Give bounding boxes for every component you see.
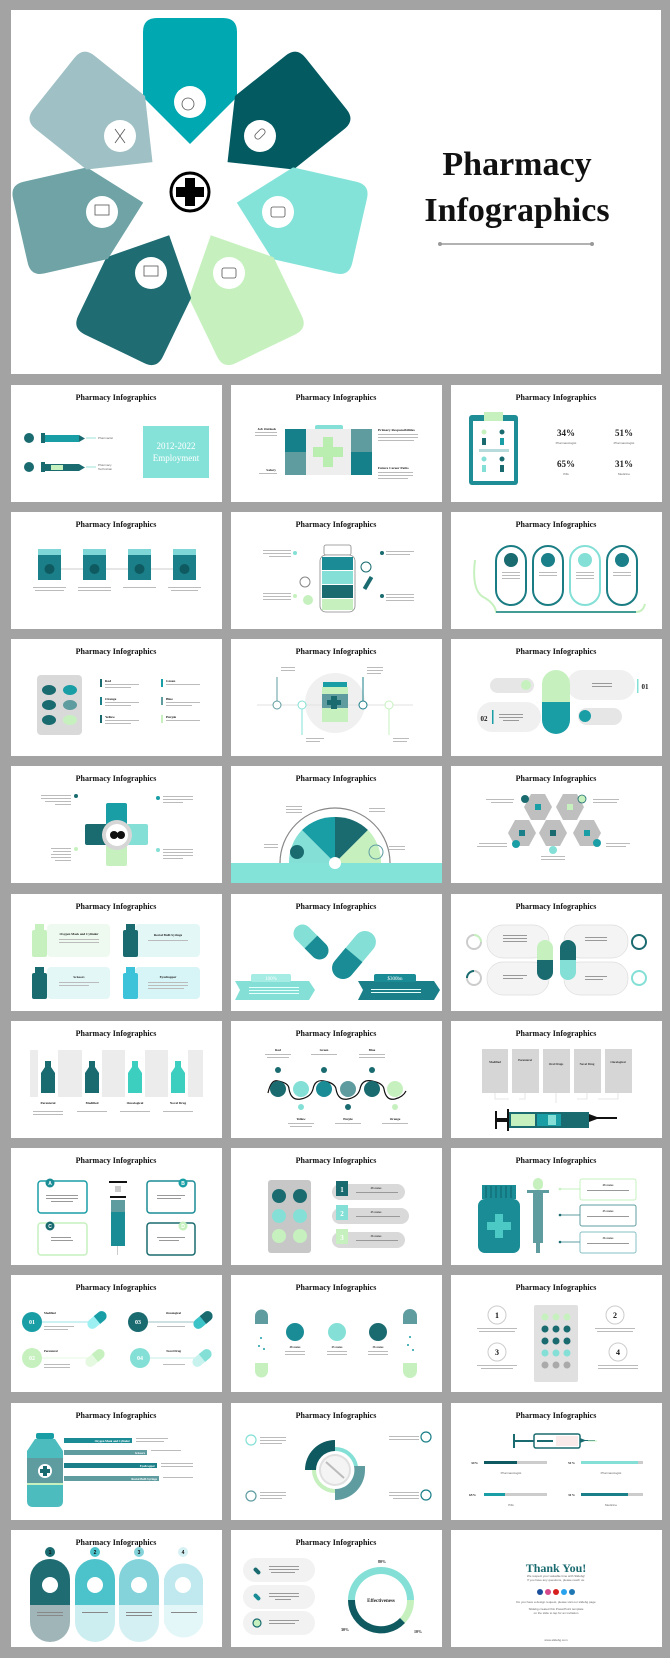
panel: slide 16 bottles columns: Parenteral [41,1101,56,1105]
panel: slide 29 effectiveness donut: 30% [341,1627,349,1632]
panel: slide 16 bottles columns: Pharmacy Infographics [76,1029,156,1038]
panel: slide 2 medical kit [231,385,442,502]
panel: slide 3 clipboard stats: Medicine [618,472,630,476]
panel: slide 13 bottles and notes: Pharmacy Infographics [76,902,156,911]
panel: slide 21 bottle and dropper: 45 states [603,1209,614,1213]
panel: slide 2 medical kit: Pharmacy Infographics [296,393,376,402]
panel: slide 20 blister steps: 45 states [371,1210,382,1214]
panel: slide 25 big bottle bars: Pharmacy Infographics [76,1411,156,1420]
panel: slide 19 ABCD boxes syringe: D [181,1224,185,1230]
panel: slide 22 numbered pill rows: Modified [44,1311,56,1315]
panel: slide 22 numbered pill rows: 03 [135,1320,141,1326]
panel: slide 29 effectiveness donut: Effectiveness [367,1599,395,1604]
panel: slide 23 test tubes: 45 states [332,1345,343,1349]
flower of petals [10,18,370,369]
panel: slide 28 numbered capsules: 3 [138,1550,141,1556]
panel: slide 2 medical kit: Job Outlook [257,427,276,431]
panel: slide 9 big capsule [451,639,662,756]
panel: slide 10 cross [11,766,222,883]
panel: slide 7 blister legend: Red [105,679,111,683]
panel: slide 30 thank you [451,1530,662,1647]
panel: slide 23 test tubes: Pharmacy Infographics [296,1283,376,1292]
panel: slide 11 semicircle gauge: Pharmacy Infographics [296,774,376,783]
panel: slide 27 syringe progress bars: 31% [568,1493,576,1497]
panel: slide 26 ring chart [231,1403,442,1520]
panel: slide 3 clipboard stats [451,385,662,502]
panel: slide 8 bottle timeline [231,639,442,756]
panel: slide 13 bottles and notes: Eyedropper [160,975,177,979]
panel: slide 3 clipboard stats: Pharmacologist [556,441,576,445]
title: Infographics [424,192,610,229]
panel: slide 21 bottle and dropper [451,1148,662,1265]
panel: slide 7 blister legend: Yellow [105,715,115,719]
panel: slide 3 clipboard stats: Pharmacologist [614,441,634,445]
panel: slide 25 big bottle bars: Eyedropper [140,1464,156,1468]
panel: slide 25 big bottle bars: Oxygen Mask and Cylinder [95,1439,131,1443]
panel: slide 22 numbered pill rows: 01 [29,1320,35,1326]
panel: slide 27 syringe progress bars: Pharmacy Infographics [516,1411,596,1420]
panel: slide 24 pill board steps [451,1275,662,1392]
panel: slide 6 stethoscope capsules: Pharmacy Infographics [516,520,596,529]
panel: slide 27 syringe progress bars: Pharmacologist [501,1471,521,1475]
panel: slide 25 big bottle bars [11,1403,222,1520]
panel: slide 18 syringe boxes: Modified [489,1060,501,1064]
panel: slide 16 bottles columns [11,1021,222,1138]
panel: slide 2 medical kit: Primary Responsibilities [378,428,415,432]
panel: slide 1 syringes employment [11,385,222,502]
icon circles on petals [86,86,294,289]
panel: slide 17 pill wave: Purple [343,1117,353,1121]
panel: slide 20 blister steps [231,1148,442,1265]
panel: slide 28 numbered capsules: 1 [49,1550,52,1556]
panel: slide 12 hexagons [451,766,662,883]
panel: slide 17 pill wave: Blue [369,1048,376,1052]
panel: slide 18 syringe boxes: Novel Drug [580,1062,595,1066]
panel: slide 5 bottle stripes: Pharmacy Infographics [296,520,376,529]
panel: slide 14 capsules ribbons: $300bn [388,977,403,982]
panel: slide 30 thank you: on the slide to tap for an invitation [534,1611,579,1615]
panel: slide 18 syringe boxes: Parenteral [518,1058,532,1062]
panel: slide 21 bottle and dropper: Pharmacy Infographics [516,1156,596,1165]
panel: slide 27 syringe progress bars: 34% [471,1461,478,1465]
panel: slide 24 pill board steps: 4 [616,1348,620,1357]
panel: slide 27 syringe progress bars: Pills [508,1503,514,1507]
panel: slide 16 bottles columns: Modified [86,1101,99,1105]
panel: slide 28 numbered capsules: 4 [182,1550,185,1556]
panel: slide 20 blister steps: 1 [340,1186,344,1194]
panel: slide 24 pill board steps: Pharmacy Infographics [516,1283,596,1292]
panel: slide 30 thank you: We respect your valuable time with Slidebg! [527,1574,585,1578]
panel: slide 30 thank you: If you have any questions, please reach us. [527,1578,585,1582]
panel: slide 22 numbered pill rows: 02 [29,1356,35,1362]
panel: slide 14 capsules ribbons: Pharmacy Infographics [296,902,376,911]
panel: slide 20 blister steps: 3 [340,1234,344,1242]
panel: slide 28 numbered capsules [11,1530,222,1647]
panel: slide 3 clipboard stats: 51% [615,428,633,438]
panel: slide 27 syringe progress bars: 51% [568,1461,576,1465]
panel: slide 22 numbered pill rows: 04 [137,1356,143,1362]
panel: slide 2 medical kit: Salary [266,468,276,472]
panel: slide 19 ABCD boxes syringe: A [48,1181,52,1187]
panel: slide 1 syringes employment: Pharmacy Infographics [76,393,156,402]
panel: slide 29 effectiveness donut: 80% [378,1559,386,1564]
panel: slide 22 numbered pill rows: Pharmacy Infographics [76,1283,156,1292]
panel: slide 1 syringes employment: Pharmacy [98,463,112,467]
panel: slide 18 syringe boxes: Pharmacy Infographics [516,1029,596,1038]
panel: slide 17 pill wave: Pharmacy Infographics [296,1029,376,1038]
panel: slide 1 syringes employment: Pharmacist [98,436,113,440]
panel: slide 30 thank you: Thank You! [526,1561,586,1575]
panel: slide 22 numbered pill rows: Oncological [166,1311,181,1315]
panel: slide 5 bottle stripes [231,512,442,629]
title: Pharmacy [442,146,592,183]
panel: slide 27 syringe progress bars: Pharmacologist [601,1471,621,1475]
panel: slide 14 capsules ribbons: 100% [265,977,277,982]
panel: slide 13 bottles and notes [11,894,222,1011]
panel: slide 29 effectiveness donut: Pharmacy Infographics [296,1538,376,1547]
panel: slide 30 thank you: Slidebg created this PowerPoint template [529,1607,584,1611]
panel: slide 22 numbered pill rows [11,1275,222,1392]
panel: slide 20 blister steps: 36 states [371,1234,382,1238]
title [424,146,610,246]
panel: slide 22 numbered pill rows: Novel Drug [166,1349,181,1353]
panel: slide 17 pill wave [231,1021,442,1138]
panel: slide 4 jars timeline [11,512,222,629]
panel: slide 17 pill wave: Green [320,1048,329,1052]
panel: slide 12 hexagons: Pharmacy Infographics [516,774,596,783]
panel: slide 16 bottles columns: Oncological [127,1101,143,1105]
panel: slide 3 clipboard stats: 31% [615,459,633,469]
panel: slide 4 jars timeline: Pharmacy Infographics [76,520,156,529]
panel: slide 29 effectiveness donut [231,1530,442,1647]
panel: slide 24 pill board steps: 3 [495,1348,499,1357]
panel: slide 19 ABCD boxes syringe [11,1148,222,1265]
panel: slide 19 ABCD boxes syringe: C [48,1224,52,1230]
panel: slide 6 stethoscope capsules [451,512,662,629]
panel: slide 16 bottles columns: Novel Drug [170,1101,186,1105]
panel: slide 27 syringe progress bars: 65% [469,1493,476,1497]
panel: slide 10 cross: Pharmacy Infographics [76,774,156,783]
panel: slide 3 clipboard stats: 34% [557,428,575,438]
panel: slide 23 test tubes [231,1275,442,1392]
panel: slide 21 bottle and dropper: 36 states [603,1236,614,1240]
icon: center medical cross [171,173,209,211]
panel: slide 1 syringes employment: Technician [98,467,113,471]
panel: slide 7 blister legend [11,639,222,756]
panel: slide 20 blister steps: 2 [340,1210,344,1218]
panel: slide 25 big bottle bars: Scissors [135,1451,146,1455]
panel: slide 18 syringe boxes: Oral Drugs [549,1062,564,1066]
panel: slide 7 blister legend: Pharmacy Infographics [76,647,156,656]
panel: slide 7 blister legend: Orange [105,697,117,701]
panel: slide 23 test tubes: 36 states [373,1345,384,1349]
panel: slide 15 capsule comparisons: Pharmacy Infographics [516,902,596,911]
panel: slide 24 pill board steps: 1 [495,1311,499,1320]
panel: slide 20 blister steps: 48 states [371,1186,382,1190]
panel: slide 22 numbered pill rows: Parenteral [44,1349,58,1353]
panel: slide 26 ring chart: Pharmacy Infographics [296,1411,376,1420]
panel: slide 3 clipboard stats: 65% [557,459,575,469]
panel: slide 9 big capsule: 01 [642,683,649,691]
panel: slide 7 blister legend: Green [166,679,175,683]
panel: slide 13 bottles and notes: Scissors [73,975,85,979]
panel: slide 17 pill wave: Red [275,1048,281,1052]
panel: slide 27 syringe progress bars [451,1403,662,1520]
panel: slide 13 bottles and notes: Rectal Bulb Syringe [154,933,183,937]
panel: slide 9 big capsule: Pharmacy Infographics [516,647,596,656]
panel: slide 9 big capsule: 02 [480,715,488,723]
panel: slide 29 effectiveness donut: 10% [414,1629,422,1634]
panel: slide 3 clipboard stats: Pharmacy Infographics [516,393,596,402]
panel: slide 13 bottles and notes: Oxygen Mask and Cylinder [60,932,99,936]
panel: slide 30 thank you: www.slidebg.com [544,1638,568,1642]
panel: slide 25 big bottle bars: Rectal Bulb Syringe [131,1477,158,1481]
panel: slide 18 syringe boxes: Oncological [610,1060,626,1064]
panel: slide 30 thank you: Do you have a design request, please visit our slidebg page [516,1600,596,1604]
panel: slide 2 medical kit: Future Career Paths [378,466,409,470]
panel: hero cover slide [10,10,661,374]
panel: slide 28 numbered capsules: Pharmacy Infographics [76,1538,156,1547]
panel: slide 1 syringes employment: Employment [153,453,200,463]
panel: slide 18 syringe boxes [451,1021,662,1138]
panel: slide 14 capsules ribbons [231,894,442,1011]
panel: slide 1 syringes employment: 2012-2022 [156,441,196,451]
panel: slide 11 semicircle gauge [231,766,442,883]
panel: slide 24 pill board steps: 2 [613,1311,617,1320]
panel: slide 20 blister steps: Pharmacy Infographics [296,1156,376,1165]
panel: slide 17 pill wave: Yellow [296,1117,306,1121]
panel: slide 19 ABCD boxes syringe: Pharmacy Infographics [76,1156,156,1165]
panel: slide 17 pill wave: Orange [390,1117,401,1121]
panel: slide 21 bottle and dropper: 48 states [603,1183,614,1187]
panel: slide 8 bottle timeline: Pharmacy Infographics [296,647,376,656]
panel: slide 23 test tubes: 48 states [290,1345,301,1349]
panel: slide 28 numbered capsules: 2 [94,1550,97,1556]
panel: slide 15 capsule comparisons [451,894,662,1011]
panel: slide 19 ABCD boxes syringe: B [181,1181,185,1187]
panel: slide 27 syringe progress bars: Medicine [605,1503,617,1507]
panel: slide 7 blister legend: Blue [166,697,173,701]
panel: slide 7 blister legend: Purple [166,715,177,719]
panel: slide 3 clipboard stats: Pills [563,472,569,476]
